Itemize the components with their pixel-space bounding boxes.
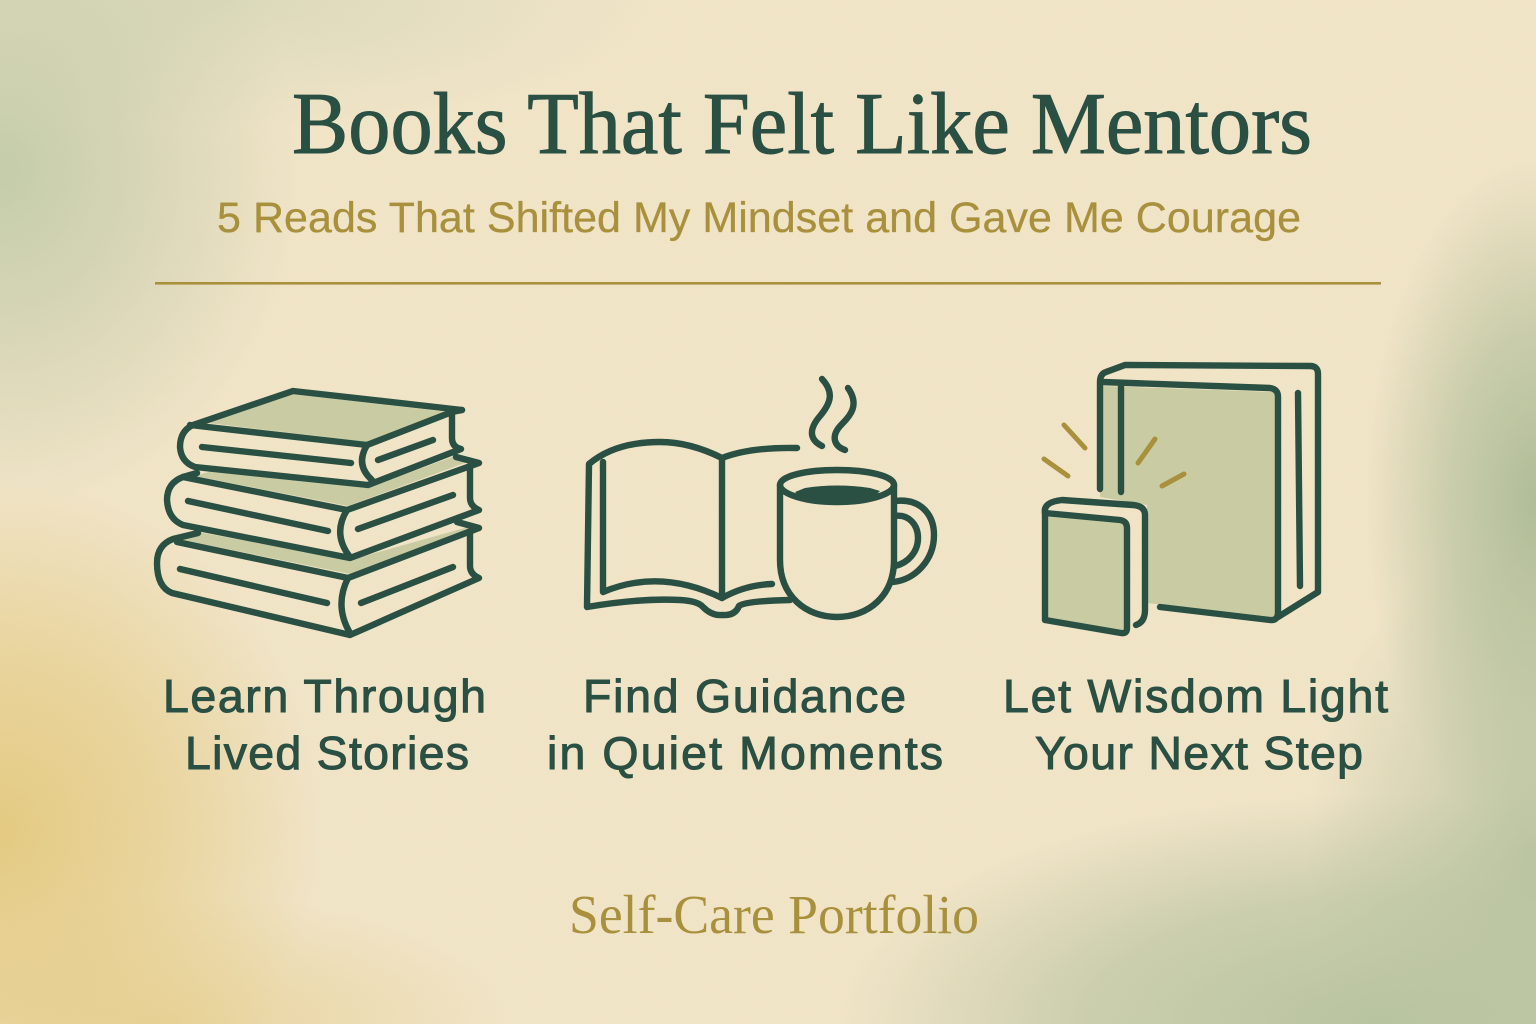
small book	[1045, 500, 1145, 633]
bottom book	[157, 522, 479, 635]
label: learn through lived stories: Learn Through	[163, 670, 486, 722]
open book	[587, 442, 797, 615]
icon: open book and coffee mug	[587, 379, 934, 617]
label: find guidance in quiet moments: Find Guidance	[583, 670, 906, 722]
light rays	[1044, 425, 1184, 486]
label: let wisdom light your next step	[1003, 670, 1388, 779]
label: let wisdom light your next step: Let Wisdom Light	[1003, 670, 1388, 722]
steam	[812, 379, 854, 450]
label: let wisdom light your next step: Your Next Step	[1035, 727, 1363, 779]
middle book	[167, 457, 479, 558]
icon: large book and small book with light rays	[1044, 365, 1318, 633]
label: learn through lived stories: Lived Stories	[185, 727, 469, 779]
title: Books That Felt Like Mentors	[292, 76, 1312, 173]
icon: stack of books	[157, 391, 479, 635]
large book	[1100, 365, 1318, 620]
label: find guidance in quiet moments: in Quiet Moments	[547, 727, 943, 779]
footer: self-care portfolio: Self-Care Portfolio	[569, 884, 979, 945]
subtitle: 5 Reads That Shifted My Mindset and Gave Me Courage	[217, 194, 1301, 242]
label: find guidance in quiet moments	[547, 670, 943, 779]
coffee mug	[780, 470, 934, 617]
top book	[180, 391, 462, 485]
label: learn through lived stories	[163, 670, 486, 779]
